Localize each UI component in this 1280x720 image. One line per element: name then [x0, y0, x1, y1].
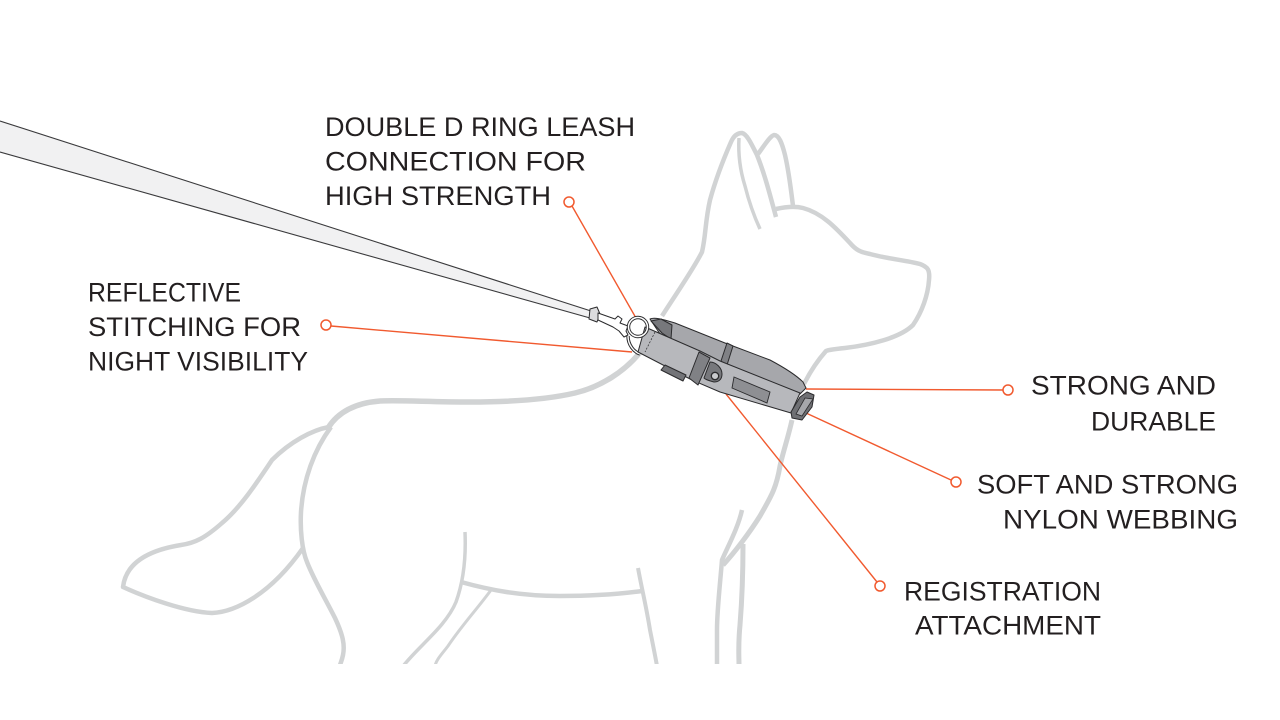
dog head and neck	[662, 133, 929, 384]
keeper loop band	[689, 352, 710, 385]
dog rear front leg	[638, 568, 657, 666]
leash clip	[589, 307, 600, 322]
leader: registration attachment	[726, 394, 885, 591]
leader: strong and durable	[806, 385, 1013, 395]
label: double D ring leash connection: HIGH STRENGTH	[325, 181, 551, 211]
buckle	[791, 392, 814, 420]
label: soft and strong nylon webbing: SOFT AND STRONG	[977, 470, 1238, 500]
dog chest and front leg	[717, 420, 792, 666]
dog inner hind leg	[404, 532, 465, 665]
label: registration attachment: REGISTRATION	[904, 576, 1101, 606]
snap hook	[598, 313, 628, 337]
annotation leader lines	[321, 197, 1013, 591]
leader: double D ring	[564, 197, 636, 318]
label: double D ring leash connection: DOUBLE D RING LEASH	[325, 112, 635, 142]
label: double D ring leash connection	[325, 112, 635, 211]
dog second hind leg	[435, 590, 491, 666]
leader: reflective stitching	[321, 320, 632, 352]
dog belly	[461, 582, 642, 596]
label: registration attachment	[904, 576, 1101, 640]
light collar strap	[638, 327, 800, 413]
registration D ring	[704, 362, 722, 382]
dog tail	[123, 427, 329, 613]
label: soft and strong nylon webbing	[977, 470, 1238, 534]
stitching	[645, 332, 655, 352]
dog outline	[123, 133, 929, 666]
label: reflective stitching	[88, 278, 308, 376]
upper D ring	[628, 318, 648, 336]
leader: nylon webbing	[806, 413, 961, 487]
label: double D ring leash connection: CONNECTION FOR	[325, 146, 586, 176]
label: strong and durable: DURABLE	[1091, 406, 1216, 436]
fabric tab	[661, 365, 686, 381]
label: reflective stitching: NIGHT VISIBILITY	[88, 346, 308, 376]
label patch	[732, 377, 770, 403]
label: registration attachment: ATTACHMENT	[915, 610, 1101, 640]
lower D ring	[628, 336, 640, 354]
dog back	[328, 350, 642, 428]
collar inner wedge	[651, 319, 672, 339]
label: strong and durable	[1031, 370, 1216, 436]
collar illustration	[589, 307, 814, 420]
upper band loop	[721, 343, 733, 365]
label: soft and strong nylon webbing: NYLON WEBBING	[1003, 504, 1238, 534]
label: reflective stitching: REFLECTIVE	[88, 278, 241, 308]
leash	[0, 121, 591, 318]
label: reflective stitching: STITCHING FOR	[88, 312, 301, 342]
dog hind leg	[301, 427, 344, 665]
label: strong and durable: STRONG AND	[1031, 370, 1216, 400]
upper collar band	[650, 318, 806, 394]
